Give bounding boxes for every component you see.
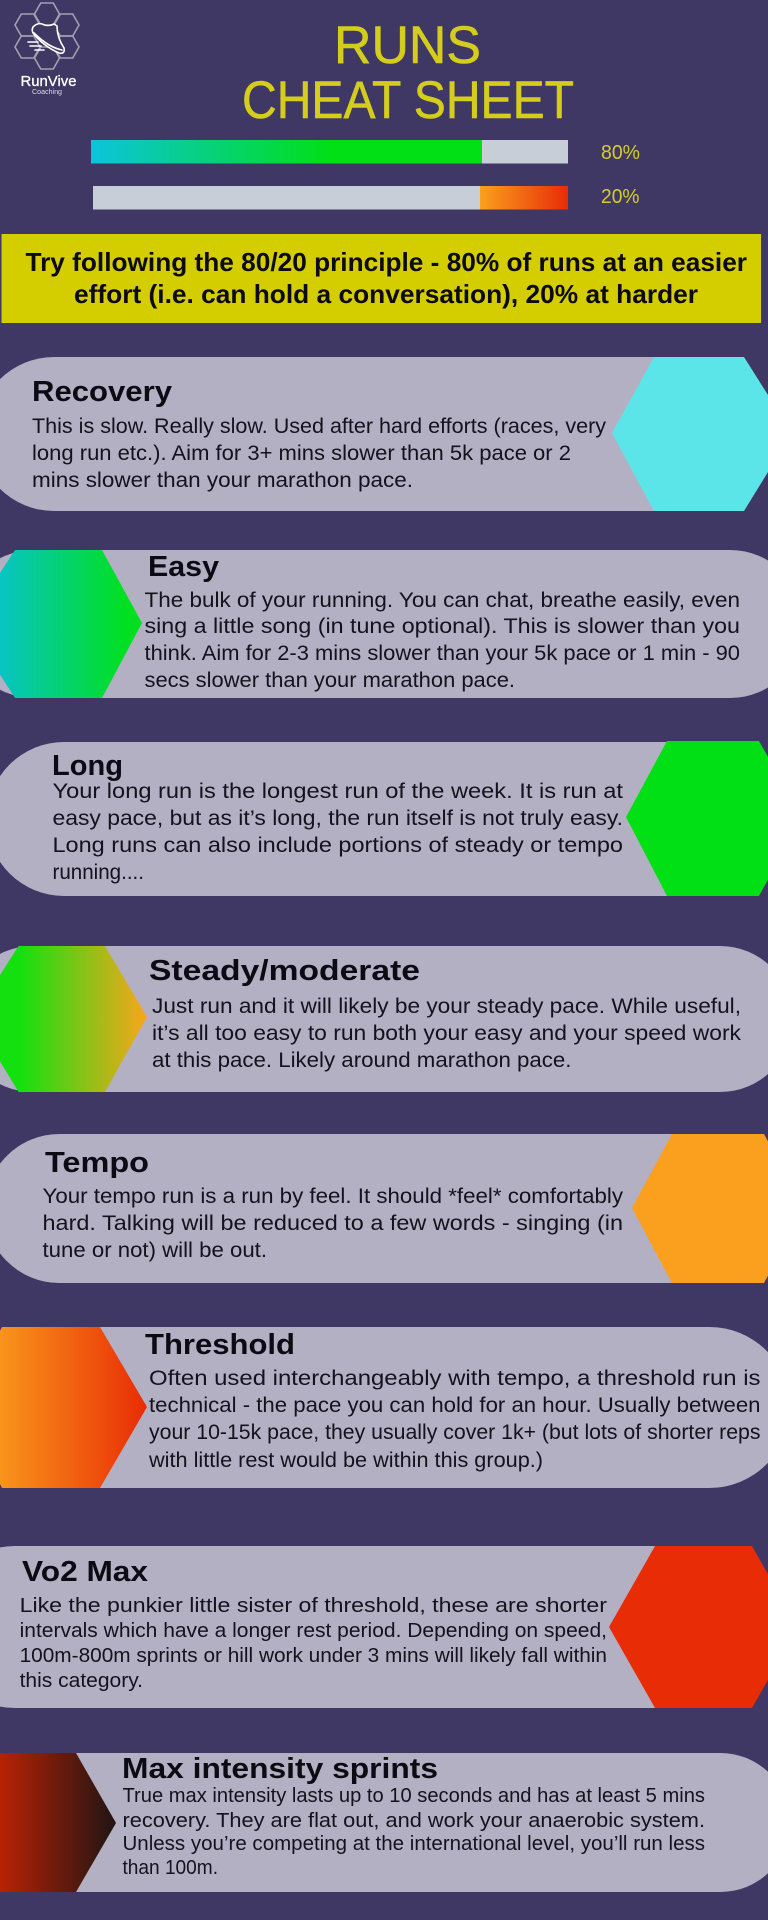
chart: 80 percent bar: 80% — [601, 142, 640, 164]
text: long description: Your long run is the longest run of the week. It is run at — [52, 780, 623, 803]
icon: honeycomb hexagons — [15, 3, 79, 69]
logo: RunVive Coaching — [15, 3, 79, 96]
text: vo2 max description: Like the punkier little sister of threshold, these are shorter — [20, 1595, 607, 1617]
icon: easy hexagon — [0, 550, 142, 698]
text: recovery description: This is slow. Really slow. Used after hard efforts (races, very — [32, 415, 607, 438]
text: threshold description — [148, 1367, 760, 1472]
text: steady description: at this pace. Likely around marathon pace. — [152, 1049, 572, 1072]
heading: tempo: Tempo — [45, 1147, 149, 1179]
title: RUNS — [334, 16, 481, 75]
text: threshold description: with little rest would be within this group.) — [148, 1449, 543, 1472]
panel: easy — [0, 550, 768, 698]
text: easy description — [144, 589, 740, 692]
text: easy description: secs slower than your marathon pace. — [144, 669, 515, 692]
panel: tempo — [0, 1134, 768, 1283]
heading: recovery: Recovery — [32, 376, 172, 408]
heading: threshold: Threshold — [145, 1329, 295, 1361]
text: max intensity description: Unless you’re competing at the international level, you’ll run less — [122, 1833, 705, 1855]
text: long description: easy pace, but as it’s long, the run itself is not truly easy. — [52, 807, 623, 830]
text: tempo description: hard. Talking will be reduced to a few words - singing (in — [42, 1212, 623, 1235]
panel: long — [0, 741, 768, 896]
title — [242, 16, 574, 130]
text: long description: running.... — [52, 861, 144, 884]
text: steady description: Just run and it will likely be your steady pace. While useful, — [152, 995, 741, 1018]
icon: running shoe — [28, 24, 64, 53]
text: tempo description: tune or not) will be out. — [42, 1239, 267, 1262]
text: max intensity description — [122, 1785, 705, 1879]
heading: steady/moderate: Steady/moderate — [149, 955, 420, 987]
icon: tempo hexagon — [632, 1134, 768, 1283]
text: long description: Long runs can also include portions of steady or tempo — [52, 834, 623, 857]
text: recovery description: mins slower than your marathon pace. — [32, 469, 413, 492]
callout: 80/20 principle — [2, 234, 761, 323]
panel: steady/moderate — [0, 946, 768, 1092]
text: easy description: The bulk of your running. You can chat, breathe easily, even — [144, 589, 740, 612]
title: CHEAT SHEET — [242, 71, 574, 130]
text: vo2 max description: intervals which have a longer rest period. Depending on speed, — [20, 1620, 607, 1642]
text: threshold description: your 10-15k pace, they usually cover 1k+ (but lots of shorter reps — [149, 1421, 760, 1444]
icon: steady hexagon — [0, 946, 147, 1092]
text: vo2 max description — [20, 1595, 607, 1692]
chart: 20 percent bar — [93, 186, 640, 210]
panel: vo2 max — [0, 1546, 768, 1708]
text: long description — [52, 780, 623, 884]
icon: threshold hexagon — [0, 1327, 147, 1488]
icon: long hexagon — [626, 741, 768, 896]
text: tempo description — [42, 1185, 624, 1262]
text: vo2 max description: 100m-800m sprints or hill work under 3 mins will likely fall within — [20, 1645, 607, 1667]
panel: recovery — [0, 357, 768, 511]
chart: 20 percent bar: 20% — [601, 186, 640, 208]
heading: vo2 max: Vo2 Max — [22, 1556, 148, 1588]
text: tempo description: Your tempo run is a run by feel. It should *feel* comfortably — [42, 1185, 624, 1208]
icon: recovery hexagon — [612, 357, 768, 511]
heading: long: Long — [52, 750, 123, 782]
panel: max intensity sprints — [0, 1753, 768, 1892]
logo wordmark: RunVive — [20, 73, 76, 90]
text: steady description — [152, 995, 742, 1072]
text: recovery description: long run etc.). Aim for 3+ mins slower than 5k pace or 2 — [32, 442, 571, 465]
logo subtitle: Coaching — [32, 89, 62, 96]
heading: max intensity sprints: Max intensity sprints — [122, 1753, 438, 1785]
text: max intensity description: recovery. They are flat out, and work your anaerobic system. — [122, 1810, 705, 1832]
text: threshold description: technical - the pace you can hold for an hour. Usually between — [149, 1394, 760, 1417]
heading: easy: Easy — [148, 551, 219, 583]
icon: vo2 max hexagon — [609, 1546, 768, 1708]
text: recovery description — [32, 415, 607, 492]
chart: 80 percent bar — [91, 140, 640, 164]
icon: max intensity hexagon — [0, 1753, 116, 1892]
callout: 80/20 principle: Try following the 80/20 principle - 80% of runs at an easier — [26, 247, 747, 277]
text: max intensity description: than 100m. — [122, 1857, 218, 1879]
text: vo2 max description: this category. — [20, 1670, 143, 1692]
text: easy description: think. Aim for 2-3 mins slower than your 5k pace or 1 min - 90 — [144, 642, 740, 665]
callout: 80/20 principle: effort (i.e. can hold a conversation), 20% at harder — [74, 279, 698, 309]
text: steady description: it’s all too easy to run both your easy and your speed work — [152, 1022, 742, 1045]
panel: threshold — [0, 1327, 768, 1488]
text: max intensity description: True max intensity lasts up to 10 seconds and has at least 5 mins — [122, 1785, 705, 1807]
text: easy description: sing a little song (in tune optional). This is slower than you — [144, 615, 740, 638]
text: threshold description: Often used interchangeably with tempo, a threshold run is — [149, 1367, 760, 1390]
